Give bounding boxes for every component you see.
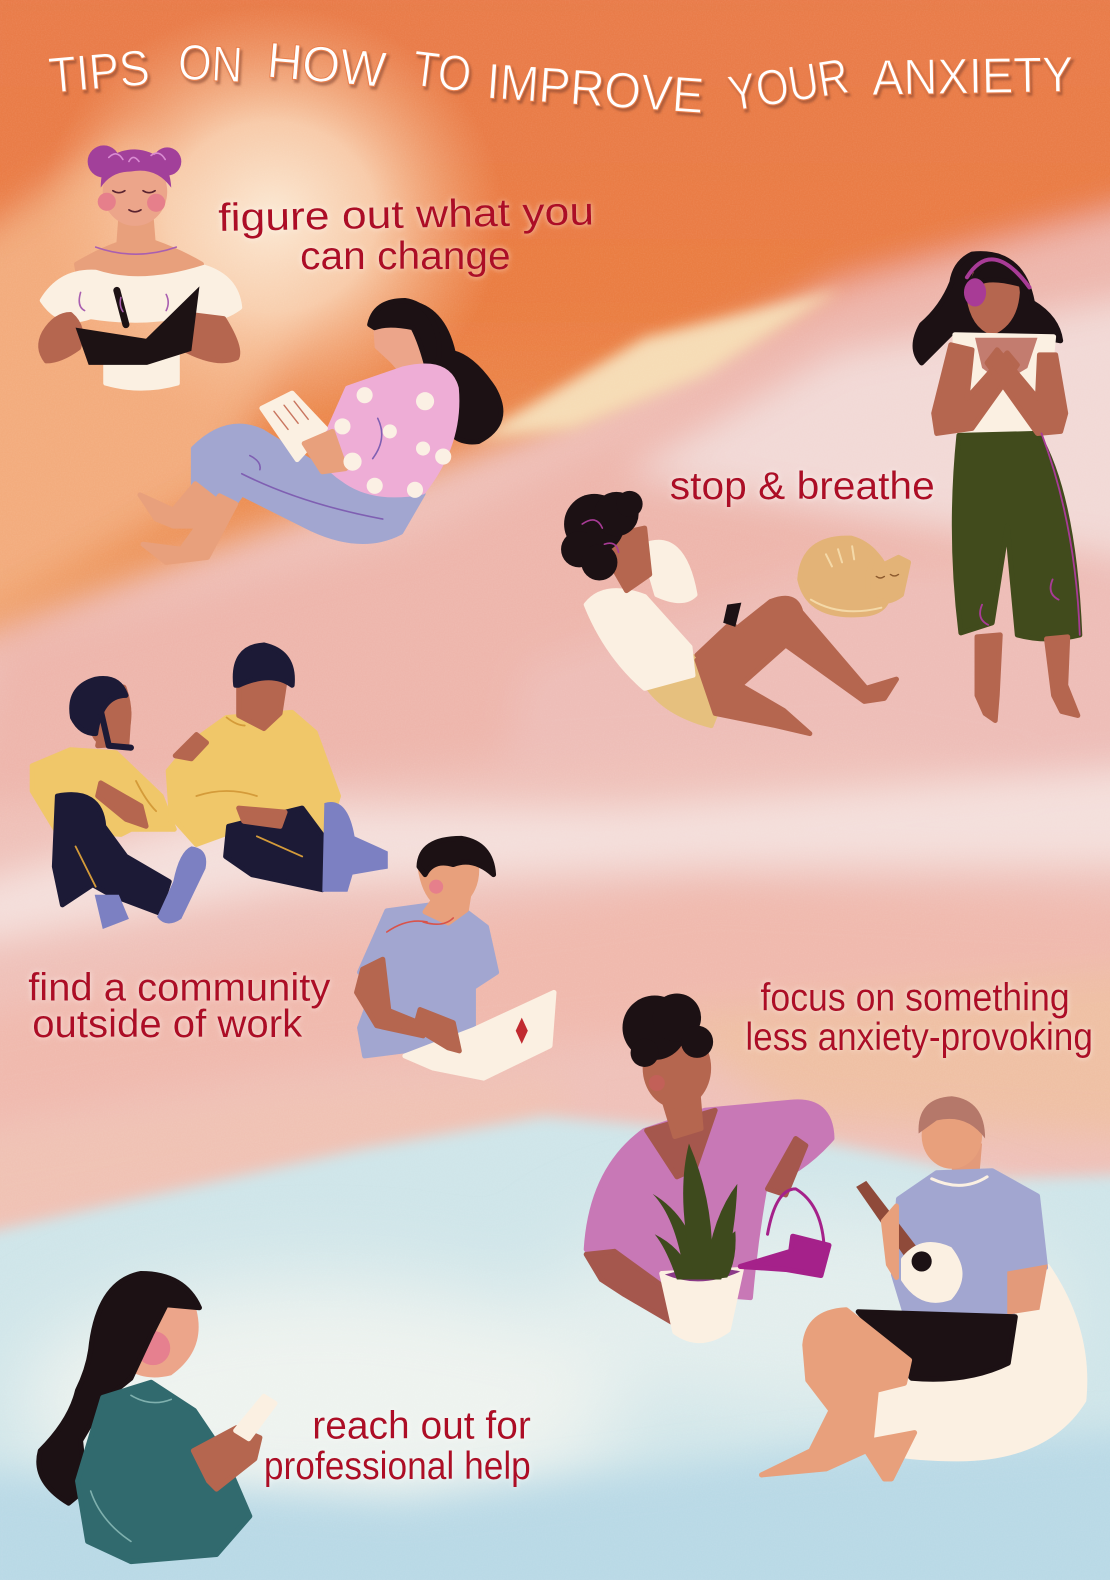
tip: find a community outside of work: find a community xyxy=(28,966,331,1010)
illustration: two friends talking xyxy=(32,645,388,929)
title: TIPS xyxy=(46,38,152,104)
tip: reach out for professional help: professional help xyxy=(264,1444,531,1488)
illustration: woman in teal reading phone xyxy=(39,1273,275,1562)
title: ON xyxy=(177,33,244,93)
tip: reach out for professional help: reach out for xyxy=(312,1404,531,1448)
illustration: woman reading in polka dot sweater xyxy=(140,300,501,562)
tip: figure out what you can change: can change xyxy=(300,234,511,278)
illustration: woman with headphones xyxy=(915,254,1080,720)
tip: figure out what you can change: figure out what you xyxy=(218,189,594,240)
title xyxy=(46,31,1074,124)
illustration: woman on phone with cat xyxy=(561,491,909,734)
illustration: woman watering plant xyxy=(586,993,832,1340)
title: HOW xyxy=(265,31,389,98)
tip: focus on something less anxiety-provoking xyxy=(745,976,1093,1059)
title: YOUR xyxy=(724,47,852,122)
illustration: person playing ukulele on bean bag xyxy=(761,1096,1085,1479)
tip: figure out what you can change xyxy=(218,189,594,278)
tip: reach out for professional help xyxy=(264,1404,531,1488)
tip: stop and breathe: stop & breathe xyxy=(670,464,935,508)
tip: find a community outside of work xyxy=(28,966,331,1046)
tip: focus on something less anxiety-provoking: focus on something xyxy=(760,976,1070,1020)
tip: find a community outside of work: outside of work xyxy=(32,1002,303,1046)
illustration: woman writing in journal xyxy=(41,145,240,388)
title: ANXIETY xyxy=(871,45,1074,106)
title: TO xyxy=(410,39,475,103)
illustration: person with laptop xyxy=(357,838,554,1078)
title: IMPROVE xyxy=(485,52,706,124)
